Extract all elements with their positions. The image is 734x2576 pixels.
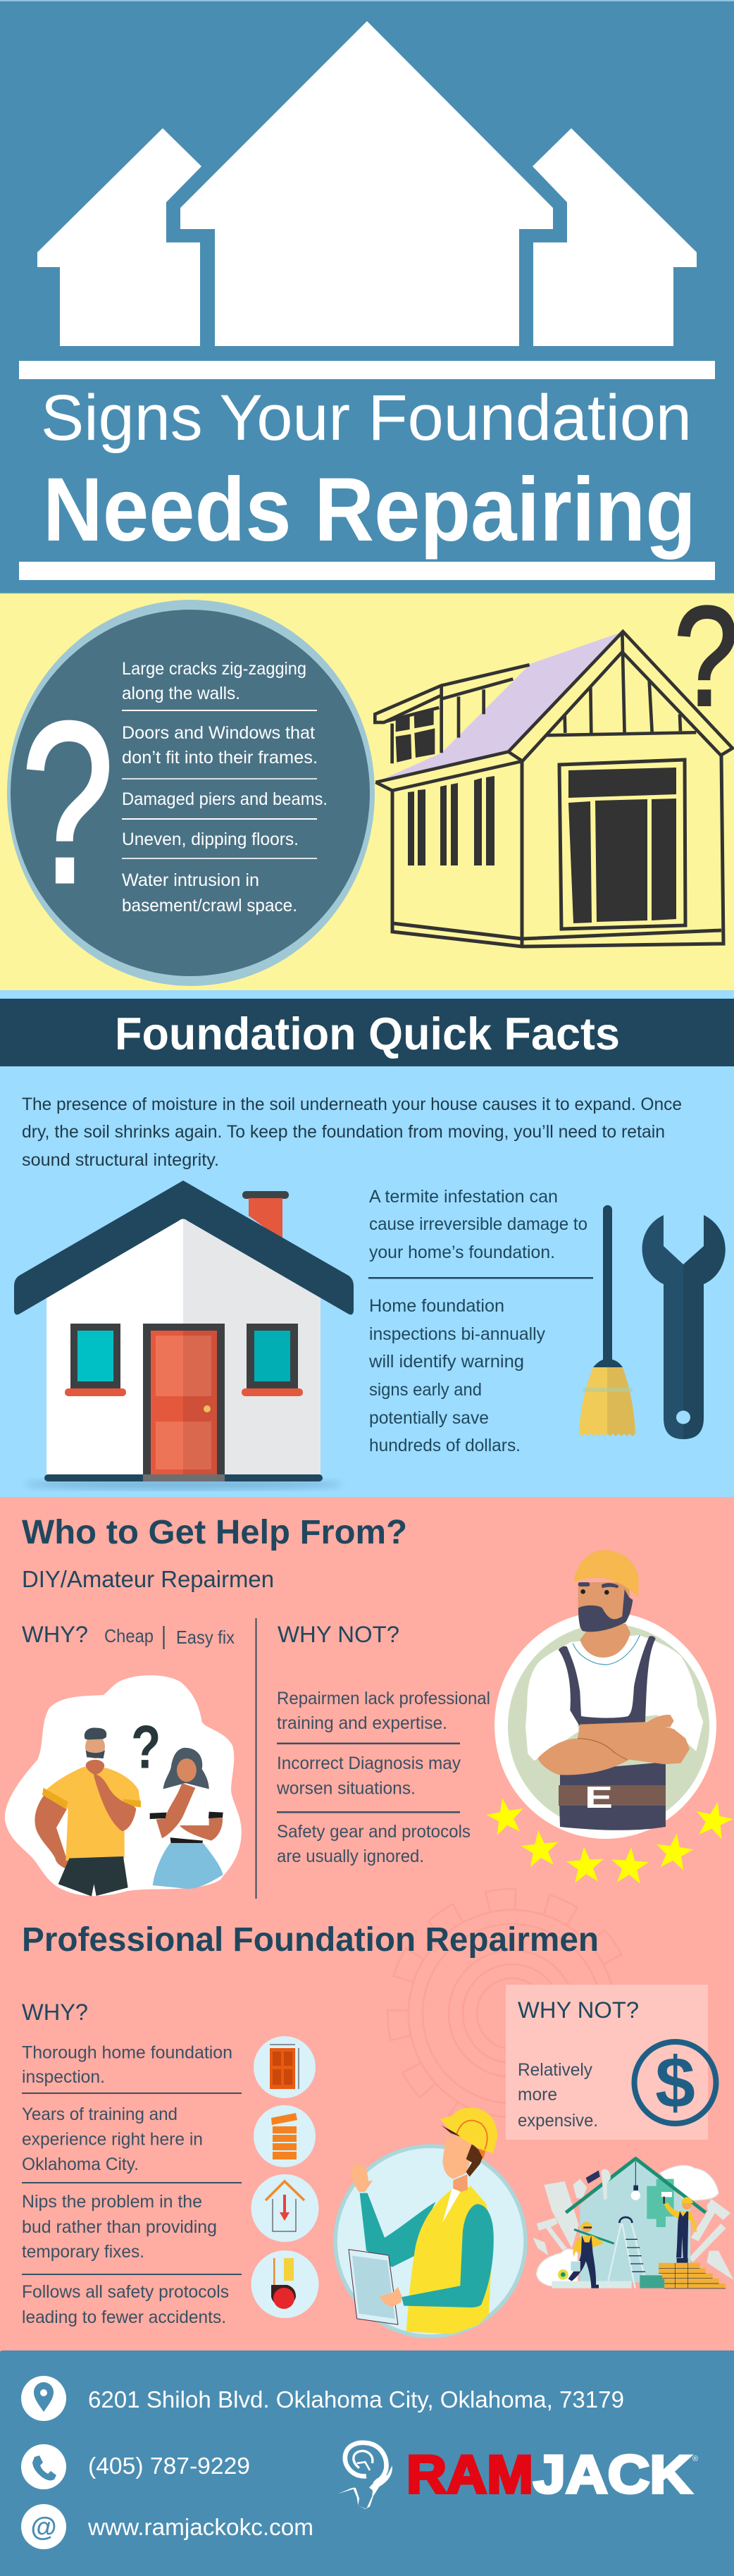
man: [35, 1727, 141, 1897]
fact: termites: A termite infestation can: [369, 1187, 558, 1207]
sign: doors and windows: Doors and Windows that: [122, 723, 315, 743]
fact: inspections: will identify warning: [368, 1352, 524, 1372]
text: address: 6201 Shiloh Blvd. Oklahoma City, Oklahoma, 73179: [88, 2386, 624, 2412]
why: DIY: [22, 1622, 235, 1649]
reason: nips the problem: [22, 2192, 217, 2262]
icon: email: [21, 2504, 66, 2549]
reason: safety: Follows all safety protocols: [22, 2282, 229, 2302]
why: DIY: WHY?: [22, 1622, 88, 1647]
illustration: renovation scene: [533, 2159, 734, 2288]
upper roof and dormer: [375, 631, 733, 791]
question mark: ?: [131, 1713, 161, 1781]
fact: inspections: potentially save: [369, 1408, 489, 1428]
reason: experience: Years of training and: [22, 2104, 178, 2124]
heading band: Foundation Quick Facts: [115, 1008, 620, 1059]
illustration: confused couple: [5, 1675, 242, 1897]
sign: doors and windows: [122, 723, 318, 768]
faint gear background: [375, 1877, 649, 2150]
panel: quick facts: [0, 990, 734, 1497]
reason: experience: [22, 2104, 203, 2174]
text: website: www.ramjackokc.com: [87, 2514, 313, 2540]
illustration: inspector with clipboard: [335, 2108, 525, 2336]
woman: [150, 1748, 223, 1889]
sign: large cracks: Large cracks zig-zagging: [122, 659, 306, 679]
icon: broom: [579, 1205, 635, 1436]
reason: inspection: inspection.: [22, 2067, 105, 2087]
heading band: [0, 999, 734, 1066]
logo: wordmark: JACK: [533, 2445, 692, 2505]
why: DIY: Cheap: [104, 1625, 154, 1646]
heading: professional: Professional Foundation Repairmen: [22, 1921, 599, 1959]
sign: water intrusion: basement/crawl space.: [122, 896, 297, 916]
why: DIY: Easy fix: [176, 1627, 235, 1648]
icon: dollar coin: [634, 2042, 716, 2124]
reason: safety: are usually ignored.: [277, 1847, 424, 1866]
reason: training: training and expertise.: [277, 1713, 447, 1733]
reason: nips the problem: temporary fixes.: [22, 2242, 144, 2262]
reason: safety: leading to fewer accidents.: [22, 2307, 226, 2327]
panel: footer contact: [1, 2350, 734, 2576]
title: line one: Signs Your Foundation: [41, 382, 692, 454]
fact: inspections: Home foundation: [369, 1296, 504, 1316]
fact: termites: [369, 1187, 587, 1262]
heading: Who to Get Help From?: [22, 1514, 407, 1551]
logo: ram head: [338, 2443, 392, 2509]
reason: training: Repairmen lack professional: [277, 1689, 490, 1708]
logo: wordmark: [406, 2445, 698, 2505]
right worker: [661, 2192, 697, 2263]
icon: wrench: [642, 1215, 726, 1439]
sign: uneven floors: Uneven, dipping floors.: [122, 830, 299, 849]
illustration: repairman in ring: [494, 1550, 716, 1839]
text: more expensive: Relatively: [518, 2060, 592, 2080]
fact: inspections: hundreds of dollars.: [369, 1436, 521, 1455]
lower walls and windows: [392, 756, 723, 947]
panel: who to get help from: [0, 1497, 734, 2351]
sign: water intrusion: [122, 870, 297, 916]
logo: wordmark: RAM: [406, 2445, 533, 2505]
belt: [559, 1785, 666, 1806]
text: more expensive: [518, 2060, 598, 2131]
fact: inspections: inspections bi-annually: [369, 1324, 545, 1344]
text: phone: (405) 787-9229: [88, 2453, 250, 2479]
title: line two: Needs Repairing: [43, 460, 696, 560]
reason: safety: [22, 2282, 229, 2327]
reason: diagnosis: [276, 1754, 461, 1799]
icon: line-art house: [375, 631, 733, 947]
reason: diagnosis: Incorrect Diagnosis may: [277, 1754, 461, 1773]
fact: termites: your home’s foundation.: [369, 1243, 555, 1262]
reason: experience: experience right here in: [22, 2130, 203, 2150]
bricks: [659, 2263, 726, 2288]
reason: inspection: [22, 2042, 232, 2087]
left worker: [568, 2222, 614, 2288]
signs circle: [7, 600, 375, 986]
reason: nips the problem: bud rather than providing: [22, 2217, 217, 2237]
icon: location: [21, 2376, 66, 2421]
bottom white rule: [19, 562, 715, 580]
belt buckle: E: [585, 1780, 613, 1815]
sign: water intrusion: Water intrusion in: [122, 870, 259, 890]
icon: flat house: [14, 1181, 354, 1490]
sign: piers and beams: Damaged piers and beams.: [122, 789, 328, 809]
text: more expensive: more: [518, 2085, 557, 2104]
icon: bricks: [254, 2105, 316, 2167]
sign: large cracks: along the walls.: [122, 684, 240, 703]
reason: nips the problem: Nips the problem in the: [22, 2192, 202, 2212]
intro paragraph: [22, 1095, 682, 1170]
panel: header: [0, 0, 734, 594]
icon: door measure: [254, 2036, 316, 2098]
icon: white question mark: ?: [21, 674, 114, 931]
callout: why not professional: WHY NOT?: [518, 1997, 639, 2023]
reason: inspection: Thorough home foundation: [22, 2042, 232, 2062]
reason: training: [277, 1689, 490, 1733]
text: more expensive: expensive.: [518, 2111, 598, 2131]
fact: termites: cause irreversible damage to: [369, 1214, 587, 1234]
intro paragraph: sound structural integrity.: [22, 1150, 219, 1170]
reason: safety: Safety gear and protocols: [277, 1822, 471, 1842]
why: professional: WHY?: [22, 1999, 88, 2025]
icon: dollar coin: $: [655, 2042, 695, 2123]
icon: email: @: [30, 2513, 57, 2542]
reason: diagnosis: worsen situations.: [276, 1779, 416, 1799]
reason: safety: [277, 1822, 471, 1866]
why not: DIY: WHY NOT?: [278, 1622, 399, 1647]
rating stars: [484, 1795, 734, 1885]
logo: wordmark: ®: [692, 2455, 698, 2463]
intro paragraph: The presence of moisture in the soil underneath your house causes it to expand. Once: [22, 1095, 682, 1114]
reason: experience: Oklahoma City.: [22, 2155, 139, 2174]
sign: doors and windows: don’t fit into their frames.: [122, 748, 318, 768]
callout: why not professional: [506, 1985, 716, 2140]
sign: large cracks: [122, 659, 306, 703]
fact: inspections: [368, 1296, 545, 1455]
fact: inspections: signs early and: [369, 1380, 482, 1400]
top white rule: [19, 361, 715, 379]
why not: DIY: [276, 1622, 490, 1866]
intro paragraph: dry, the soil shrinks again. To keep the foundation from moving, you’ll need to retain: [22, 1122, 665, 1142]
icon: tape measure: [251, 2250, 318, 2318]
panel: warning signs: [0, 577, 734, 990]
icon: roof height: [251, 2174, 318, 2242]
icon: phone: [21, 2444, 66, 2489]
icon: three house silhouettes: [37, 21, 697, 346]
subheading: DIY: DIY/Amateur Repairmen: [22, 1566, 274, 1592]
